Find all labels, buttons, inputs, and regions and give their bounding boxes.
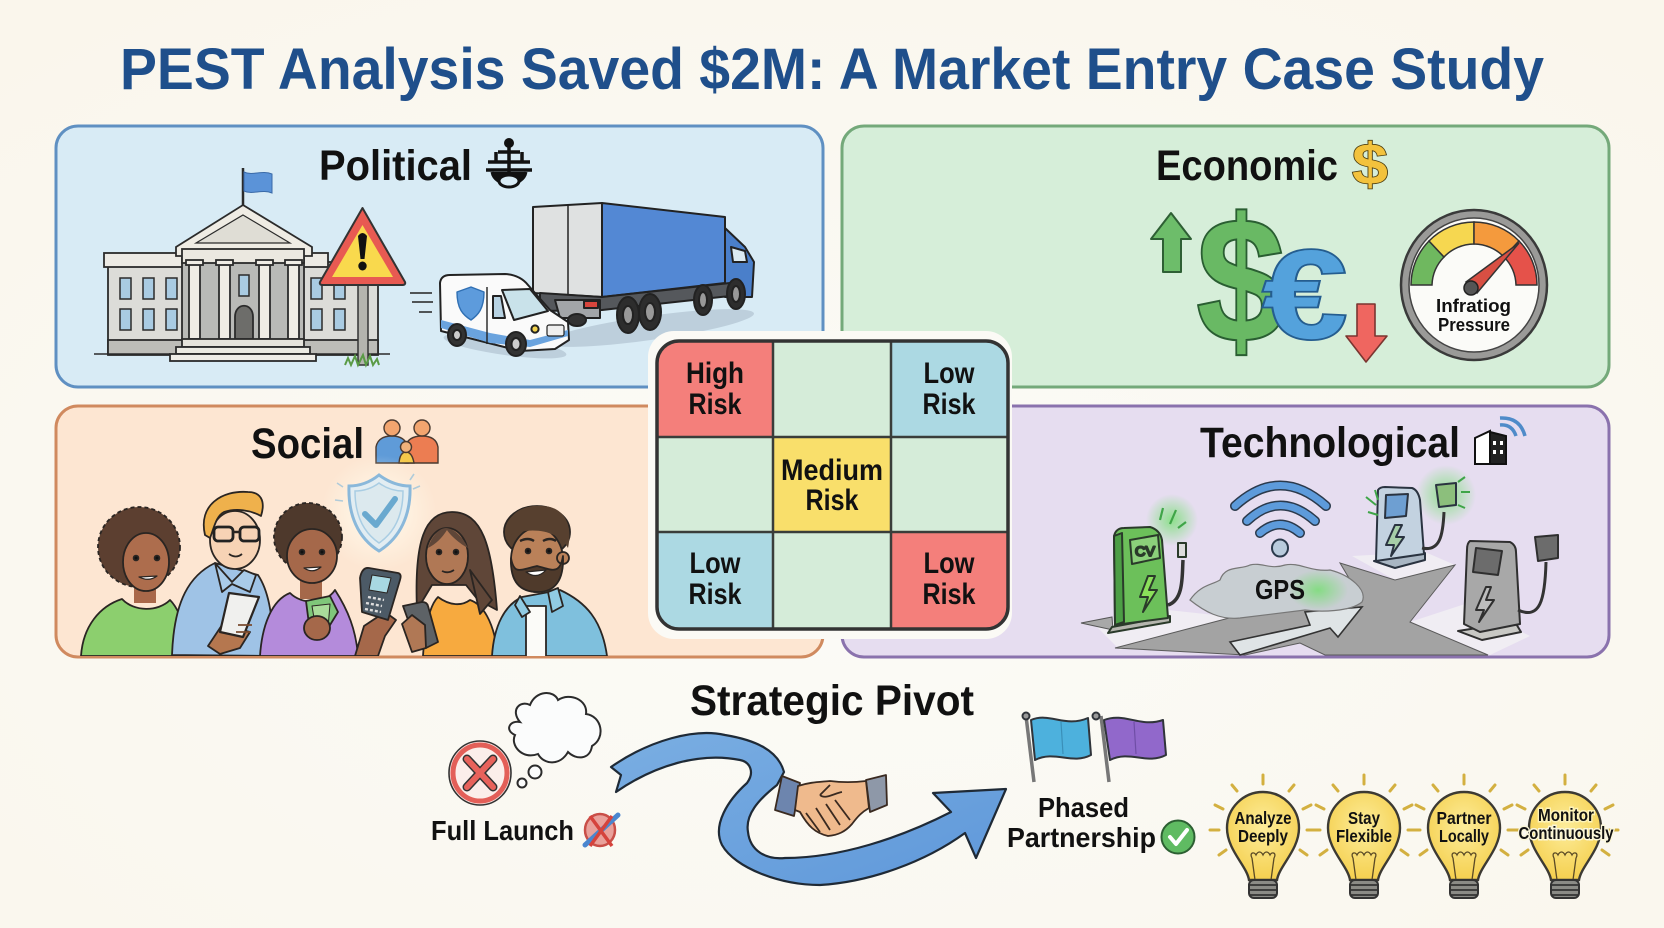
icon: smart building — [1475, 418, 1525, 464]
labels: risk levels: Risk — [806, 484, 859, 517]
icon: down arrow — [1346, 304, 1387, 362]
person: purple shirt with cash and card terminal — [260, 503, 401, 656]
cell: medium risk — [773, 437, 891, 532]
illustration: GPS cloud — [1190, 564, 1363, 618]
icon: political scales — [486, 140, 532, 187]
heading: political: Political — [319, 142, 472, 190]
label: phased partnership: Phased — [1038, 792, 1129, 823]
cell: low risk top right — [891, 340, 1009, 437]
icon: gold dollar: $ — [1352, 132, 1388, 197]
labels: risk levels: Low — [924, 547, 975, 580]
cell: high risk — [656, 340, 773, 437]
icon: partner flags — [1022, 712, 1166, 782]
icon: bulb stay flexible: Stay — [1348, 808, 1380, 828]
arrow: pivot path — [611, 733, 1006, 885]
labels: risk levels: Low — [924, 357, 975, 390]
panel: political — [56, 126, 823, 387]
cell: low risk bottom left — [656, 532, 773, 630]
label: full launch: Full Launch — [431, 815, 574, 846]
illustration: government building — [94, 168, 390, 361]
labels: risk levels: Risk — [922, 578, 976, 611]
labels: risk levels: Medium — [781, 454, 883, 487]
icon: family — [376, 420, 438, 463]
icon: crossed out launch — [585, 814, 618, 846]
icon: wifi signal — [1235, 486, 1326, 556]
panel: economic — [842, 126, 1609, 387]
chart: inflation gauge — [1401, 210, 1547, 360]
heading: economic: Economic — [1156, 142, 1338, 190]
icon: warning sign — [320, 208, 405, 365]
icon: blue euro: € — [1263, 224, 1347, 365]
labels: risk levels: Risk — [922, 388, 976, 421]
chart: inflation gauge: Pressure — [1438, 314, 1510, 335]
icon: green EV charger — [1108, 494, 1198, 633]
icon: green dollar: $ — [1197, 183, 1285, 379]
icon: bulb monitor continuously: Monitor — [1538, 805, 1594, 825]
panel: technological — [842, 406, 1609, 657]
person: blonde with glasses — [172, 492, 275, 656]
icon: up arrow — [1151, 213, 1191, 272]
labels: risk levels: High — [686, 357, 744, 390]
icon: handshake — [775, 775, 887, 836]
person: long hair orange shirt with phone — [402, 512, 498, 656]
labels: risk levels — [686, 357, 976, 611]
icon: rejected plan circle — [449, 741, 511, 805]
label: phased partnership: Partnership — [1007, 822, 1156, 853]
illustration: box truck — [533, 203, 756, 354]
person: green shirt — [81, 507, 190, 656]
icon: bulb stay flexible — [1311, 775, 1417, 898]
panel: social — [56, 406, 823, 658]
illustration: GPS cloud: GPS — [1255, 574, 1305, 605]
labels: risk levels: Risk — [688, 388, 742, 421]
chart: risk matrix — [648, 331, 1012, 639]
illustration: group of consumers — [81, 492, 607, 658]
icon: bulb analyze deeply — [1210, 775, 1316, 898]
icon: bulb partner locally: Locally — [1439, 826, 1489, 846]
illustration: delivery van — [410, 274, 569, 364]
icon: green EV charger: CV — [1135, 543, 1156, 559]
label: phased partnership — [1007, 792, 1156, 853]
heading: strategic pivot: Strategic Pivot — [690, 677, 974, 725]
title: PEST Analysis Saved $2M: A Market Entry Case Study — [120, 37, 1544, 102]
cell: low risk bottom right — [891, 532, 1009, 630]
icon: blue EV charger — [1366, 465, 1476, 568]
icon: bulb monitor continuously: Continuously — [1518, 823, 1614, 843]
labels: risk levels: Low — [690, 547, 741, 580]
heading: social: Social — [251, 420, 364, 468]
person: bearded man blue overshirt — [492, 506, 607, 658]
icon: bulb analyze deeply: Deeply — [1238, 826, 1288, 846]
icon: bulb analyze deeply: Analyze — [1234, 808, 1292, 828]
heading: technological: Technological — [1200, 419, 1460, 467]
chart: inflation gauge: Infratiog — [1436, 295, 1511, 316]
icon: thought cloud — [509, 693, 601, 788]
icon: bulb partner locally: Partner — [1436, 808, 1492, 828]
icon: green check — [1162, 820, 1194, 854]
labels: risk levels: Risk — [688, 578, 742, 611]
icon: bulb partner locally — [1411, 775, 1517, 898]
icon: bulb stay flexible: Flexible — [1336, 826, 1392, 846]
illustration: road network — [1081, 552, 1530, 655]
illustration: trust shield — [321, 455, 437, 571]
icon: bulb monitor continuously — [1512, 775, 1618, 898]
icon: grey EV charger — [1458, 535, 1558, 640]
